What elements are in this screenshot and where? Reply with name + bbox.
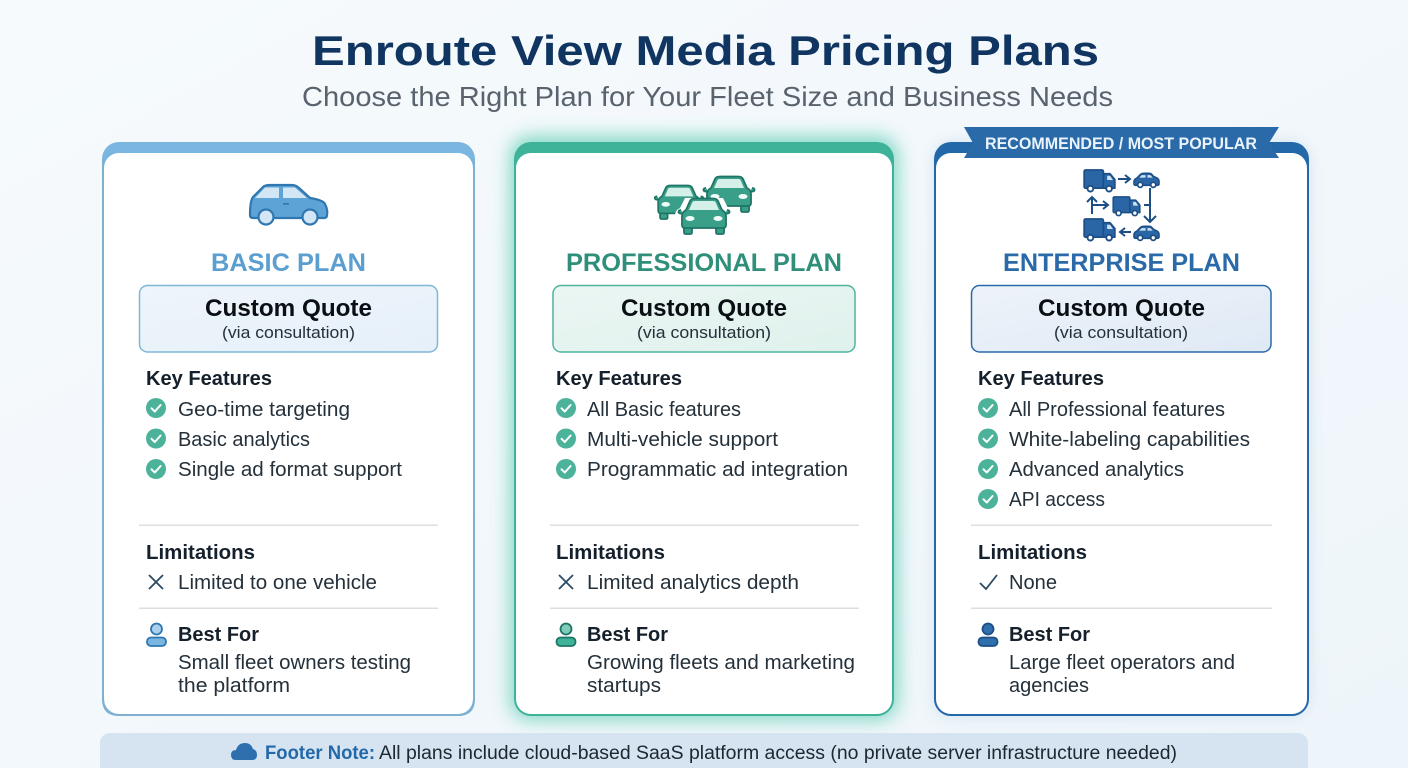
plan name: enterprise: ENTERPRISE PLAN xyxy=(1003,249,1240,277)
price box: basic: Custom Quote xyxy=(205,295,372,322)
key features: professional: Programmatic ad integration xyxy=(587,458,848,481)
limitations: basic xyxy=(146,541,377,594)
icon: single car xyxy=(250,185,327,224)
best for: enterprise xyxy=(978,623,1235,697)
plan name: basic: BASIC PLAN xyxy=(211,249,366,277)
best for: enterprise: Best For xyxy=(1009,623,1090,646)
limitations: enterprise: Limitations xyxy=(978,541,1087,564)
footer note: All plans include cloud-based SaaS platform access (no private server infrastructure needed) xyxy=(379,743,1177,764)
best for: enterprise: agencies xyxy=(1009,674,1089,697)
price box: professional: Custom Quote xyxy=(621,295,787,322)
limitations: professional xyxy=(556,541,799,594)
key features: enterprise: White-labeling capabilities xyxy=(1009,428,1250,451)
icon: cloud xyxy=(231,743,257,760)
icon: fleet network xyxy=(1084,170,1159,241)
price box: enterprise: (via consultation) xyxy=(1054,323,1188,342)
limitations: basic: Limitations xyxy=(146,541,255,564)
best for: professional: startups xyxy=(587,674,661,697)
plan name: professional: PROFESSIONAL PLAN xyxy=(566,249,842,277)
key features: professional: Key Features xyxy=(556,367,682,390)
limitations: enterprise: None xyxy=(1009,571,1057,594)
footer note: Footer Note: xyxy=(265,743,375,764)
key features: professional: Multi-vehicle support xyxy=(587,428,778,451)
ribbon: recommended xyxy=(964,127,1279,158)
price box: professional xyxy=(553,286,855,352)
best for: basic: Small fleet owners testing xyxy=(178,651,411,674)
best for: basic: the platform xyxy=(178,674,290,697)
limitations: basic: Limited to one vehicle xyxy=(178,571,377,594)
key features: professional: All Basic features xyxy=(587,398,741,421)
price box: enterprise xyxy=(972,286,1271,352)
key features: basic xyxy=(146,367,402,481)
limitations: professional: Limited analytics depth xyxy=(587,571,799,594)
limitations: professional: Limitations xyxy=(556,541,665,564)
key features: basic: Geo-time targeting xyxy=(178,398,350,421)
best for: basic xyxy=(147,623,411,697)
key features: professional xyxy=(556,367,848,481)
key features: enterprise: Advanced analytics xyxy=(1009,458,1184,481)
key features: enterprise: All Professional features xyxy=(1009,398,1225,421)
best for: basic: Best For xyxy=(178,623,259,646)
panel: enterprise plan xyxy=(934,127,1309,716)
footer note xyxy=(100,733,1308,768)
best for: professional: Best For xyxy=(587,623,668,646)
title: Enroute View Media Pricing Plans xyxy=(312,27,1099,74)
key features: enterprise: API access xyxy=(1009,488,1105,511)
limitations: enterprise xyxy=(978,541,1087,594)
key features: basic: Single ad format support xyxy=(178,458,402,481)
ribbon: recommended: RECOMMENDED / MOST POPULAR xyxy=(985,135,1257,153)
subtitle: Choose the Right Plan for Your Fleet Size and Business Needs xyxy=(302,81,1113,112)
key features: basic: Basic analytics xyxy=(178,428,310,451)
price box: enterprise: Custom Quote xyxy=(1038,295,1205,322)
key features: enterprise xyxy=(978,367,1250,511)
key features: enterprise: Key Features xyxy=(978,367,1104,390)
best for: professional: Growing fleets and marketing xyxy=(587,651,855,674)
best for: enterprise: Large fleet operators and xyxy=(1009,651,1235,674)
panel: professional plan xyxy=(510,136,898,720)
price box: basic: (via consultation) xyxy=(222,323,355,342)
best for: professional xyxy=(556,623,855,697)
price box: basic xyxy=(140,286,438,352)
panel: basic plan xyxy=(102,142,475,716)
icon: three cars xyxy=(655,176,755,238)
key features: basic: Key Features xyxy=(146,367,272,390)
price box: professional: (via consultation) xyxy=(637,323,771,342)
